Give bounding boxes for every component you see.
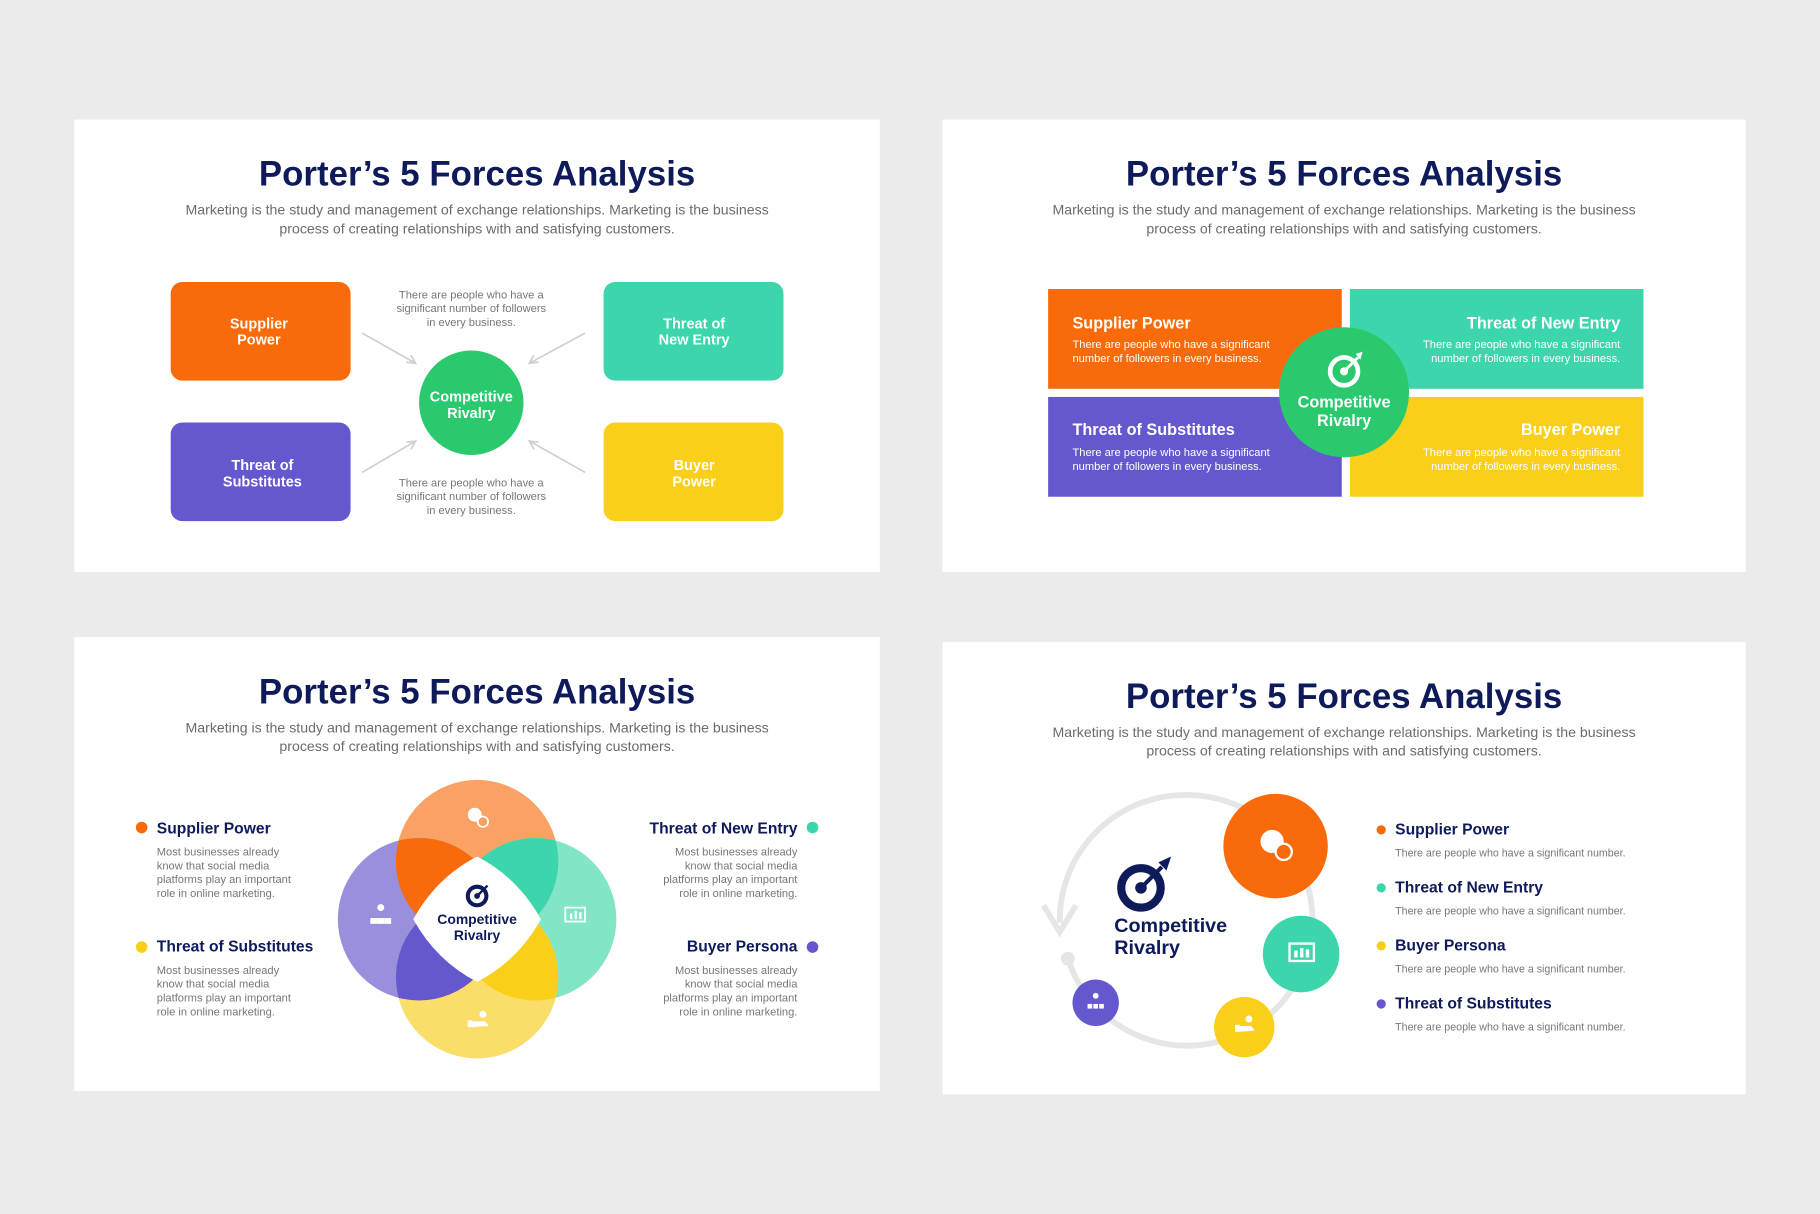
block: supplier power (1048, 289, 1342, 389)
block: supplier power: Supplier Power (1072, 314, 1191, 332)
item: supplier power (136, 820, 292, 900)
box: threat of new entry (604, 282, 783, 381)
center circle: competitive rivalry (1279, 327, 1409, 457)
center: competitive rivalry (419, 351, 524, 455)
circle: supplier power icon (1223, 794, 1328, 898)
item: buyer persona: role in online marketing. (679, 1007, 797, 1019)
center: competitive rivalry: Competitive (430, 390, 513, 406)
item: buyer persona: know that social media (685, 979, 798, 991)
text: bottom note: There are people who have a (399, 477, 544, 489)
item: supplier power: role in online marketing. (157, 888, 275, 900)
title: Porter’s 5 Forces Analysis (259, 155, 695, 194)
subtitle (185, 719, 769, 754)
circle: new entry icon (1263, 916, 1339, 992)
text: bottom note: significant number of followers (396, 491, 547, 503)
item: buyer persona (663, 939, 818, 1019)
block: threat of substitutes: There are people who have a significant (1072, 447, 1271, 459)
subtitle: process of creating relationships with and satisfying customers. (1146, 743, 1542, 759)
box: threat of substitutes: Threat of (231, 458, 294, 474)
icon: target (1121, 857, 1171, 908)
box: threat of substitutes: Substitutes (223, 474, 302, 490)
text: top note (396, 289, 547, 329)
block: threat of new entry (1350, 289, 1644, 389)
venn diagram (338, 780, 616, 1058)
panel: grid layout (942, 120, 1746, 572)
subtitle: Marketing is the study and management of exchange relationships. Marketing is the business (1052, 202, 1636, 218)
item: supplier power: know that social media (157, 860, 270, 872)
label: competitive rivalry: Rivalry (1114, 937, 1180, 959)
list: There are people who have a significant number. (1395, 848, 1626, 860)
panel: cycle layout (942, 642, 1746, 1094)
block: threat of new entry: Threat of New Entry (1467, 314, 1620, 332)
box: threat of substitutes (171, 422, 351, 521)
block: supplier power: There are people who have a significant (1072, 339, 1271, 351)
item: supplier power: Supplier Power (157, 820, 271, 837)
label: competitive rivalry (1114, 915, 1227, 959)
block: supplier power: number of followers in every business. (1072, 353, 1262, 365)
box: supplier power: Supplier (230, 316, 288, 332)
subtitle: Marketing is the study and management of exchange relationships. Marketing is the business (1052, 724, 1636, 740)
box: supplier power: Power (237, 333, 281, 349)
block: threat of substitutes: Threat of Substitutes (1072, 421, 1235, 439)
item: threat of substitutes: platforms play an important (157, 993, 292, 1005)
text: top note: in every business. (427, 317, 516, 329)
item: threat of new entry: platforms play an important (663, 874, 798, 886)
subtitle: process of creating relationships with and satisfying customers. (1146, 220, 1542, 236)
text: top note: significant number of followers (396, 303, 547, 315)
center: competitive rivalry: Competitive (437, 911, 517, 927)
title: Porter’s 5 Forces Analysis (259, 672, 695, 711)
block: buyer power: number of followers in every business. (1431, 461, 1620, 473)
block: buyer power: Buyer Power (1521, 421, 1621, 439)
item: supplier power: platforms play an important (157, 874, 292, 886)
list: Supplier Power (1395, 821, 1509, 838)
title: Porter’s 5 Forces Analysis (1126, 155, 1562, 194)
item: buyer persona: Buyer Persona (687, 939, 798, 956)
center: competitive rivalry: Rivalry (454, 927, 501, 943)
block: threat of substitutes (1048, 397, 1342, 497)
subtitle (1052, 724, 1636, 759)
box: threat of new entry: New Entry (659, 333, 730, 349)
box: supplier power (171, 282, 351, 381)
icon: target (1330, 352, 1363, 385)
title: Porter’s 5 Forces Analysis (1126, 677, 1562, 716)
list: Buyer Persona (1395, 938, 1506, 955)
item: threat of substitutes: role in online marketing. (157, 1007, 275, 1019)
item: threat of new entry: Most businesses already (675, 846, 798, 858)
list: Threat of New Entry (1395, 880, 1543, 897)
circle: buyer icon (1214, 997, 1274, 1057)
subtitle (1052, 202, 1636, 236)
circle: substitutes icon (1072, 980, 1119, 1026)
box: buyer power (604, 422, 783, 521)
panel: venn layout (74, 637, 880, 1091)
text: bottom note (396, 477, 547, 517)
item: threat of substitutes: Most businesses already (157, 965, 280, 977)
center circle: competitive rivalry: Rivalry (1317, 412, 1371, 430)
subtitle: process of creating relationships with and satisfying customers. (279, 220, 675, 236)
subtitle: Marketing is the study and management of exchange relationships. Marketing is the business (185, 202, 769, 218)
box: buyer power: Power (672, 474, 716, 490)
cycle diagram (1043, 794, 1339, 1057)
block: buyer power: There are people who have a significant (1423, 447, 1621, 459)
subtitle: Marketing is the study and management of exchange relationships. Marketing is the business (185, 719, 769, 735)
block: threat of new entry: There are people who have a significant (1423, 339, 1621, 351)
panel: box layout (74, 120, 880, 572)
block: threat of new entry: number of followers in every business. (1431, 353, 1620, 365)
item: threat of substitutes: know that social media (157, 979, 270, 991)
list: There are people who have a significant number. (1395, 964, 1626, 976)
list (1377, 821, 1626, 1034)
text: bottom note: in every business. (427, 505, 516, 517)
list: Threat of Substitutes (1395, 996, 1552, 1013)
center: competitive rivalry (413, 857, 541, 982)
item: threat of new entry (650, 820, 818, 900)
list: There are people who have a significant number. (1395, 1022, 1626, 1034)
box: threat of new entry: Threat of (663, 316, 725, 332)
block: threat of substitutes: number of followers in every business. (1072, 461, 1262, 473)
item: threat of substitutes (136, 939, 314, 1019)
item: threat of substitutes: Threat of Substitutes (157, 939, 314, 956)
label: competitive rivalry: Competitive (1114, 915, 1227, 937)
item: threat of new entry: role in online marketing. (679, 888, 797, 900)
subtitle: process of creating relationships with and satisfying customers. (279, 738, 675, 754)
center circle: competitive rivalry: Competitive (1298, 393, 1391, 411)
subtitle (185, 202, 769, 236)
item: buyer persona: Most businesses already (675, 965, 798, 977)
item: threat of new entry: know that social media (685, 860, 798, 872)
block: buyer power (1350, 397, 1644, 497)
box: buyer power: Buyer (674, 458, 715, 474)
list: There are people who have a significant number. (1395, 906, 1626, 918)
center: competitive rivalry: Rivalry (447, 406, 495, 422)
item: threat of new entry: Threat of New Entry (650, 820, 798, 837)
arrows (362, 333, 585, 472)
item: supplier power: Most businesses already (157, 846, 280, 858)
item: buyer persona: platforms play an important (663, 993, 798, 1005)
icons (370, 808, 585, 1027)
text: top note: There are people who have a (399, 289, 544, 301)
